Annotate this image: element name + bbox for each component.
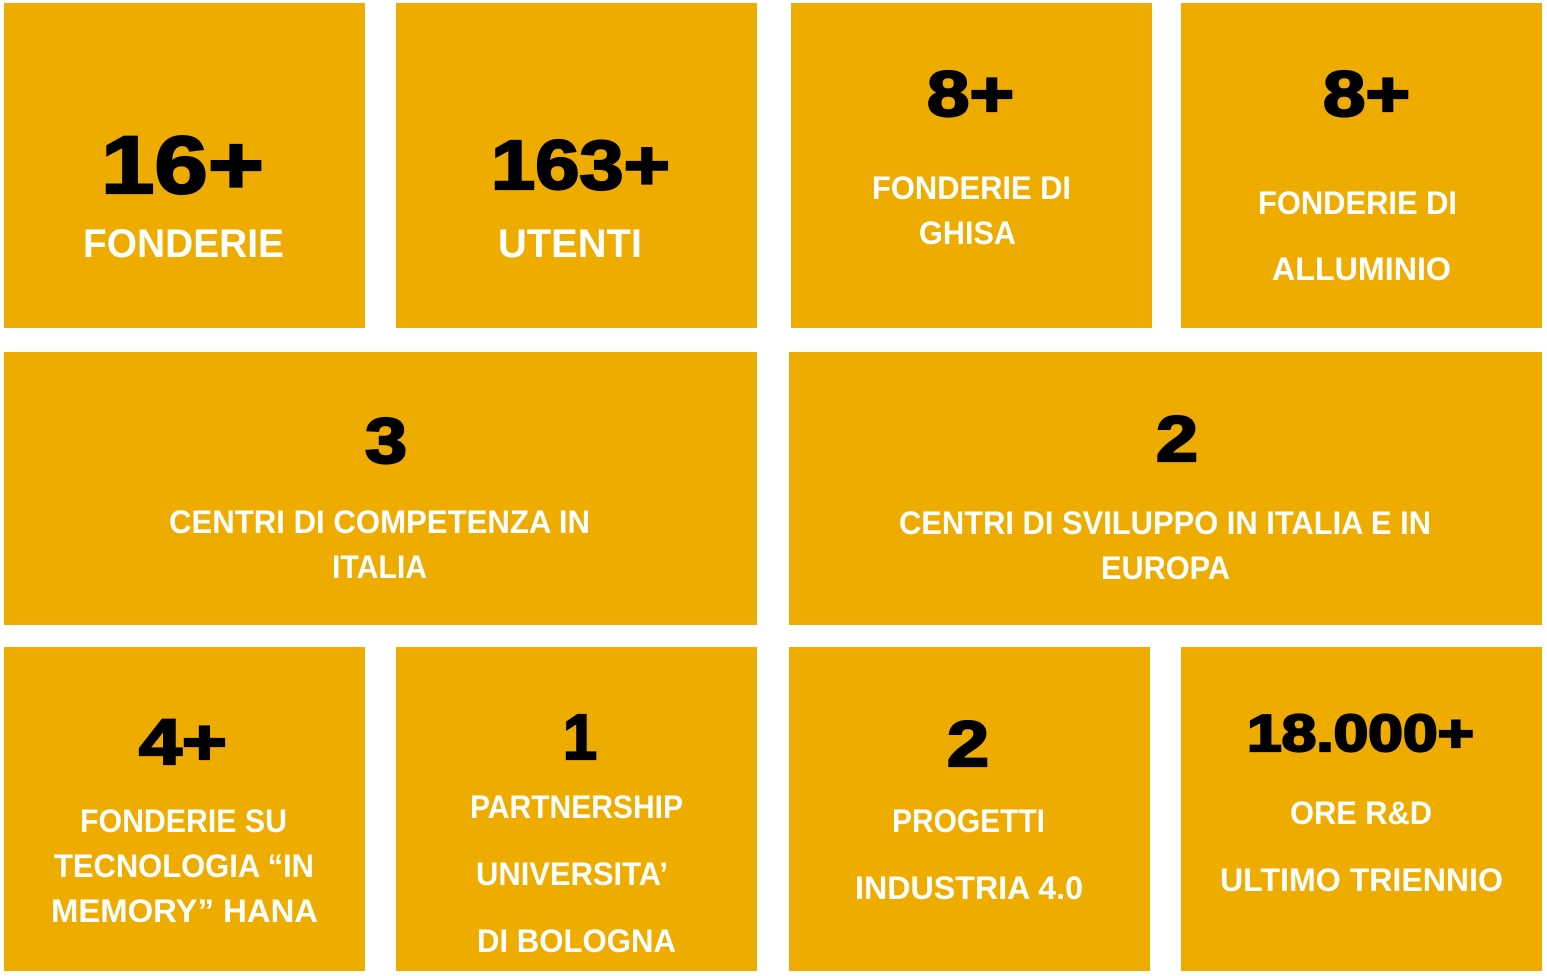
number: 8+: 8+ (927, 58, 1014, 130)
number: 2: 2 (947, 708, 989, 780)
label: partnership universita di bologna: PARTNERSHIP (470, 789, 683, 825)
label: fonderie su tecnologia in memory hana: FONDERIE SU (80, 803, 287, 839)
panel: 163+ utenti (396, 3, 757, 328)
label: centri di sviluppo in italia e in europa: EUROPA (1101, 550, 1230, 586)
label: progetti industria 4.0: PROGETTI (892, 803, 1045, 839)
label: centri di sviluppo in italia e in europa: CENTRI DI SVILUPPO IN ITALIA E IN (899, 505, 1431, 541)
label: fonderie di alluminio: ALLUMINIO (1272, 251, 1451, 287)
label: fonderie di ghisa (872, 170, 1071, 251)
label: centri di competenza in italia: ITALIA (332, 549, 427, 585)
label: centri di competenza in italia (169, 504, 590, 585)
panel: 8+ fonderie di ghisa (791, 3, 1152, 328)
number: 2: 2 (1156, 403, 1198, 475)
number: 16+: 16+ (101, 120, 264, 211)
number: 3: 3 (365, 405, 407, 477)
panel: 2 progetti industria 4.0 (789, 647, 1150, 971)
number: 4+: 4+ (139, 706, 227, 778)
label: progetti industria 4.0: INDUSTRIA 4.0 (855, 870, 1083, 906)
label: fonderie di ghisa: FONDERIE DI (872, 170, 1071, 206)
panel: 16+ fonderie (4, 3, 365, 328)
label: fonderie di ghisa: GHISA (919, 215, 1016, 251)
number: 8+: 8+ (1323, 58, 1410, 130)
label: fonderie di alluminio (1258, 185, 1457, 287)
label: centri di competenza in italia: CENTRI DI COMPETENZA IN (169, 504, 590, 540)
label: partnership universita di bologna: DI BOLOGNA (477, 923, 676, 959)
label: fonderie di alluminio: FONDERIE DI (1258, 185, 1457, 221)
panel: 4+ fonderie su tecnologia (4, 647, 365, 971)
label: fonderie su tecnologia in memory hana: MEMORY” HANA (51, 893, 318, 929)
label: utenti: UTENTI (498, 222, 642, 266)
label: ore r&d ultimo triennio: ULTIMO TRIENNIO (1220, 862, 1503, 898)
label: partnership universita di bologna (470, 789, 683, 959)
label: ore r&d ultimo triennio (1220, 795, 1503, 898)
panel: 8+ fonderie di alluminio (1181, 3, 1542, 328)
panel: 1 partnership (396, 647, 757, 971)
number: 1: 1 (563, 701, 597, 773)
label: ore r&d ultimo triennio: ORE R&D (1290, 795, 1432, 831)
label: fonderie su tecnologia in memory hana: TECNOLOGIA “IN (54, 848, 314, 884)
label: partnership universita di bologna: UNIVERSITA’ (476, 856, 668, 892)
panel: 3 centri di competenza (4, 352, 757, 625)
label: centri di sviluppo in italia e in europa (899, 505, 1431, 586)
label: fonderie su tecnologia in memory hana (51, 803, 318, 929)
label: fonderie: FONDERIE (83, 222, 284, 266)
panel: 2 centri di sviluppo (789, 352, 1542, 625)
label: progetti industria 4.0 (855, 803, 1083, 906)
number: 163+: 163+ (491, 126, 670, 204)
number: 18.000+: 18.000+ (1247, 705, 1474, 763)
panel: 18.000+ ore r&d (1181, 647, 1542, 971)
